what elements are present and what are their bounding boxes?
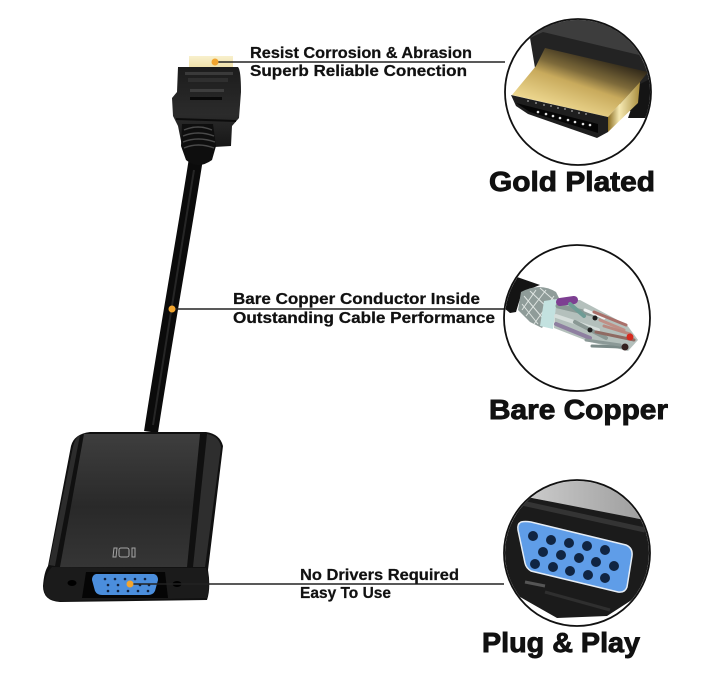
top face	[60, 434, 200, 567]
panel: bare copper detail circle	[504, 245, 650, 391]
callout text: gold plated: Resist Corrosion & Abrasion	[250, 45, 472, 62]
VGA icon	[113, 548, 135, 557]
leader line: gold plated	[212, 58, 505, 66]
callout text: gold plated: Superb Reliable Conection	[250, 63, 467, 80]
blue VGA socket	[518, 522, 632, 592]
leader line: plug and play	[126, 580, 504, 588]
heading: bare copper: Bare Copper	[489, 394, 668, 425]
HDMI plug	[172, 56, 241, 165]
screw holes	[68, 580, 76, 586]
black jacket	[504, 277, 540, 313]
black port housing	[503, 497, 655, 618]
panel: gold plated detail circle	[505, 18, 660, 165]
callout text: plug and play	[300, 567, 459, 602]
panel: plug and play detail circle	[503, 475, 655, 626]
gold top	[512, 48, 648, 117]
right strip	[193, 434, 221, 567]
foil	[540, 299, 557, 329]
callout text: bare copper: Outstanding Cable Performance	[233, 310, 495, 327]
gold connector tip	[189, 56, 233, 68]
braid	[518, 287, 560, 328]
wire bundle base	[554, 300, 638, 351]
heading: gold plated: Gold Plated	[489, 166, 655, 197]
plug body	[172, 67, 241, 147]
VGA port	[82, 572, 168, 598]
callout text: plug and play: Easy To Use	[300, 585, 391, 602]
left strip	[49, 435, 80, 566]
connector mouth	[511, 95, 608, 138]
callout text: bare copper	[233, 291, 495, 327]
gold side	[608, 82, 640, 132]
cable	[151, 158, 196, 432]
leader line: bare copper	[168, 306, 504, 312]
strain relief	[181, 124, 216, 165]
front face	[44, 567, 209, 601]
callout text: bare copper: Bare Copper Conductor Inside	[233, 291, 480, 308]
wires	[556, 300, 634, 347]
callout text: gold plated	[250, 45, 472, 80]
heading: plug and play: Plug & Play	[482, 627, 640, 658]
VGA adapter box	[43, 432, 223, 602]
callout text: plug and play: No Drivers Required	[300, 567, 459, 584]
dark housing	[530, 18, 660, 118]
